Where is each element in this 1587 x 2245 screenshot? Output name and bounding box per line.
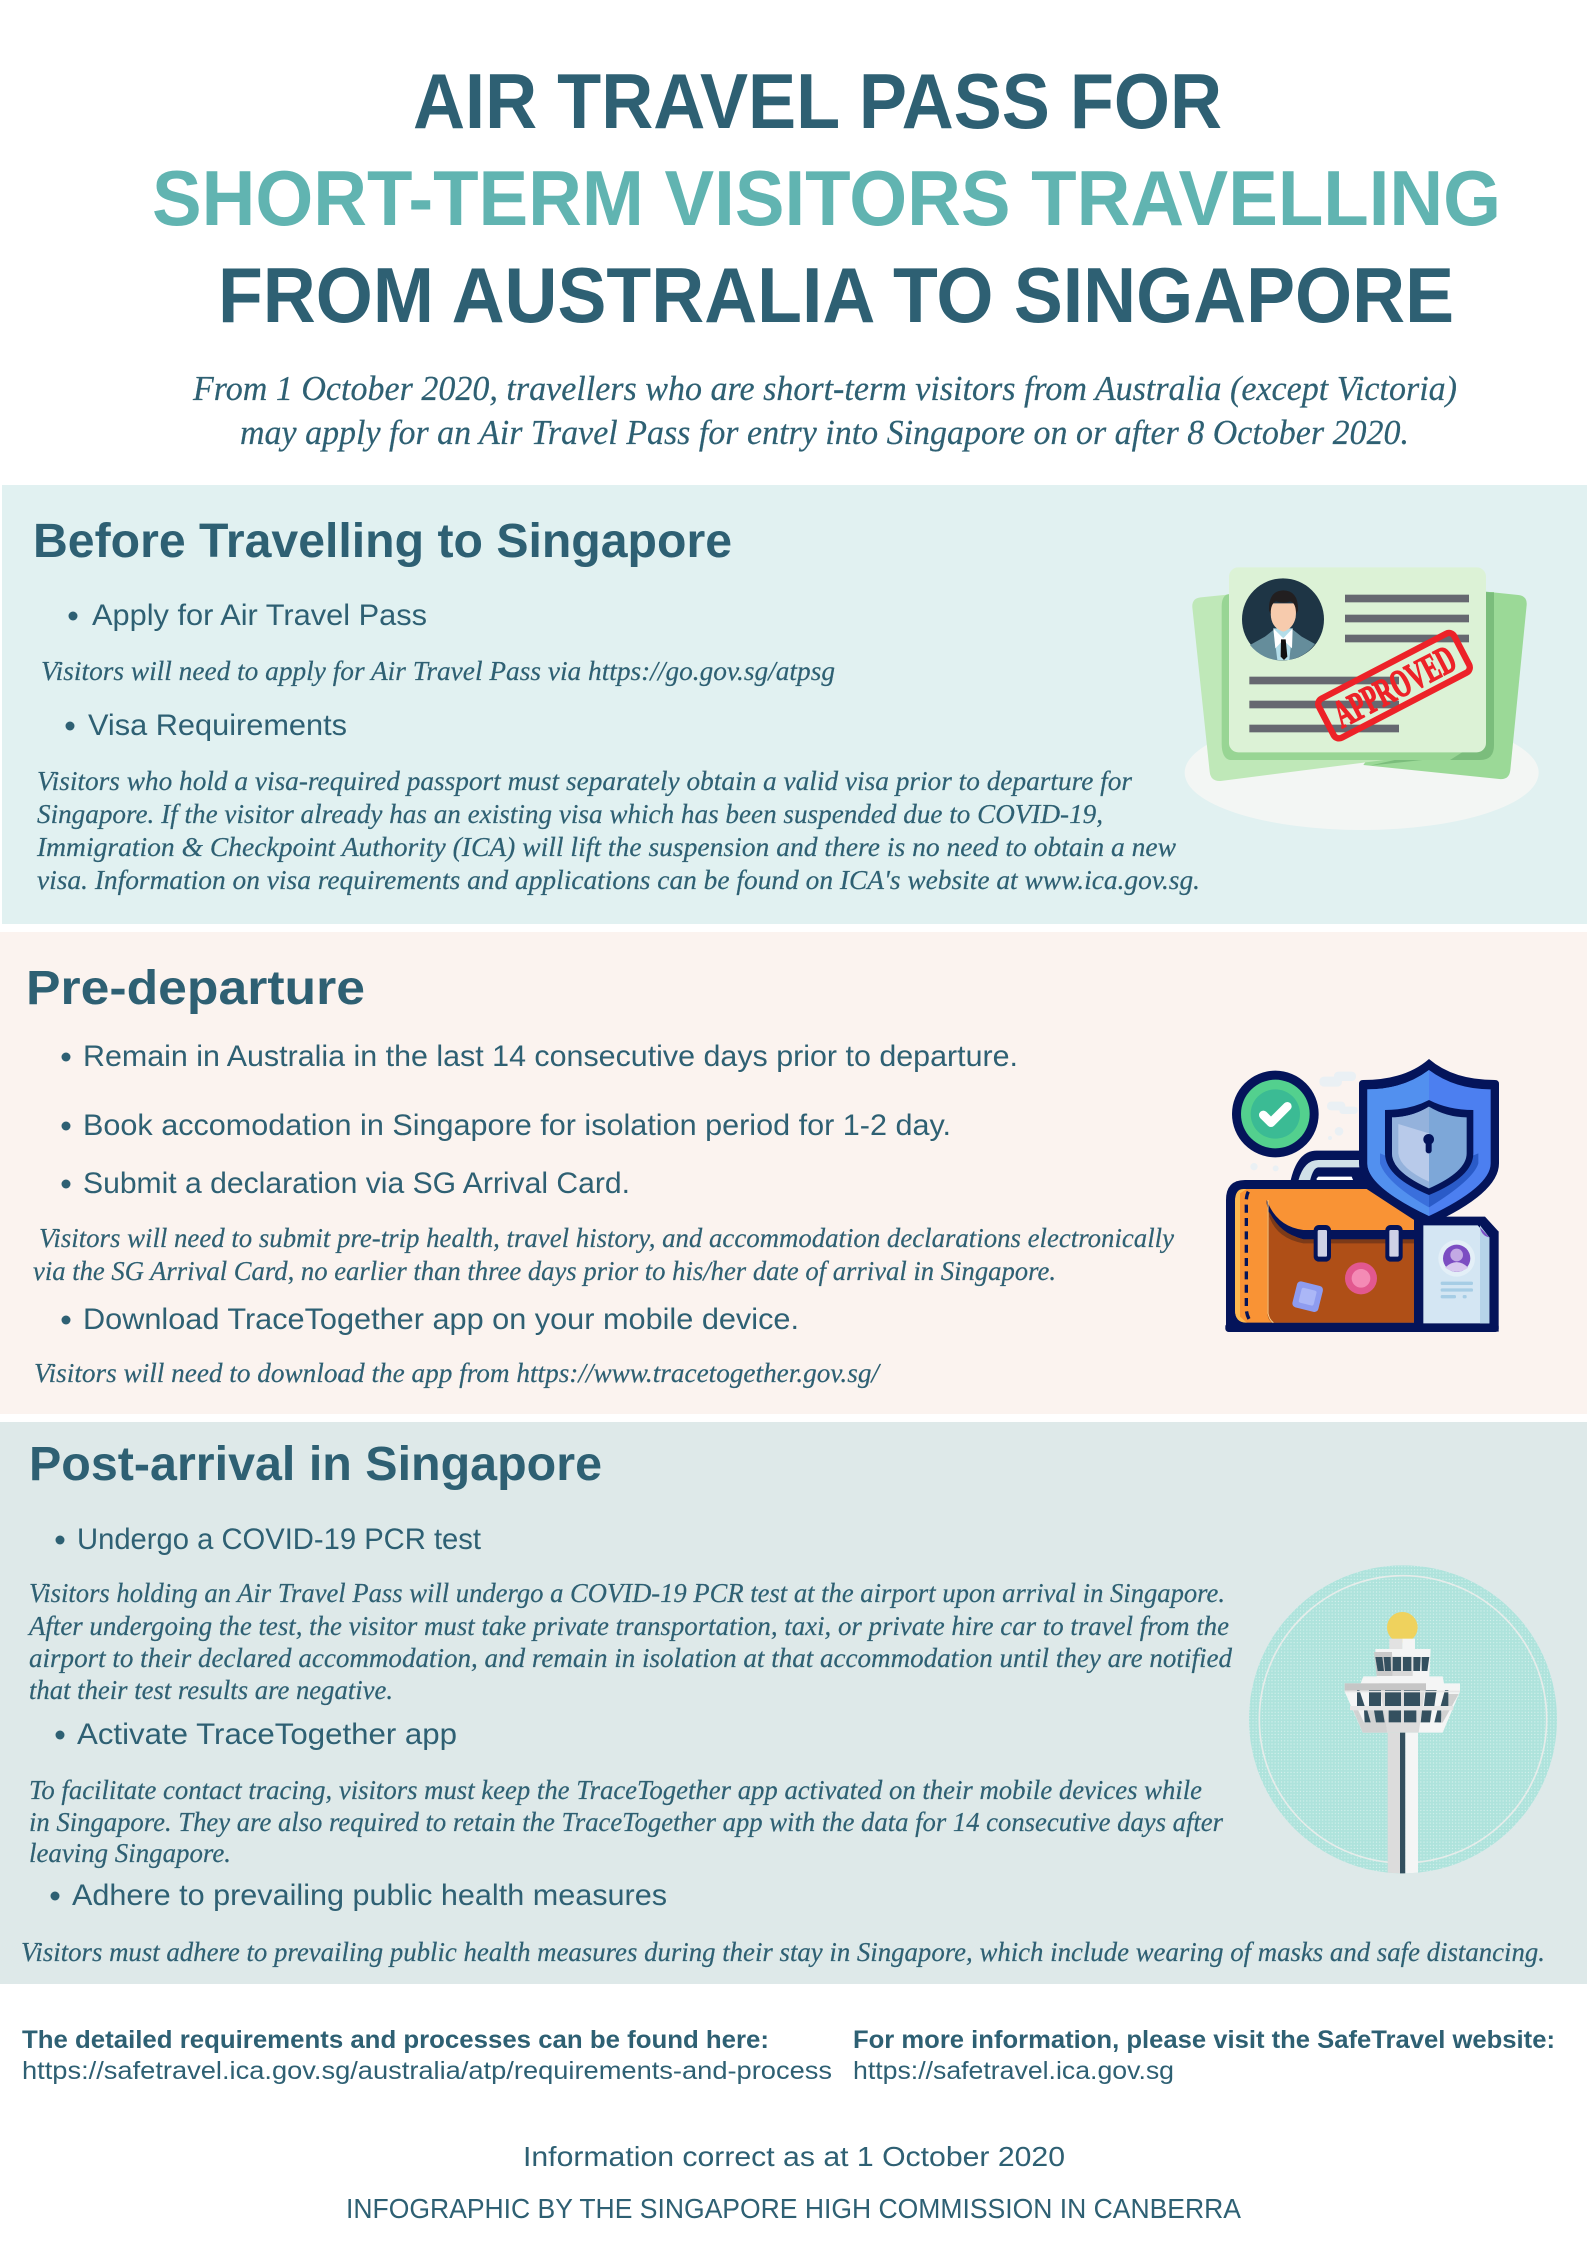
subtitle: may apply for an Air Travel Pass for entry into Singapore on or after 8 October 2020. (240, 413, 1409, 452)
footer: credit: INFOGRAPHIC BY THE SINGAPORE HIGH COMMISSION IN CANBERRA (346, 2193, 1241, 2224)
text: declaration details: via the SG Arrival Card, no earlier than three days prior to his/her date of arrival in Singapore. (33, 1256, 1056, 1286)
bullet: activate TraceTogether: Activate TraceTogether app (77, 1718, 457, 1751)
text: contact tracing details (29, 1775, 1223, 1868)
footer: requirements link (22, 2026, 832, 2085)
bullet: download TraceTogether: Download TraceTogether app on your mobile device. (83, 1303, 799, 1336)
heading: post-arrival: Post-arrival in Singapore (29, 1438, 602, 1491)
footer: SafeTravel link: https://safetravel.ica.gov.sg (853, 2057, 1174, 2085)
subtitle (192, 369, 1457, 452)
panel: post-arrival in Singapore (0, 1422, 1587, 1984)
title: AIR TRAVEL PASS FOR (413, 57, 1222, 145)
icon: suitcase, shield and document (1225, 1059, 1499, 1332)
text: PCR test details (27, 1578, 1232, 1705)
text: contact tracing details: leaving Singapore. (29, 1838, 231, 1868)
bullet: book accommodation: Book accomodation in Singapore for isolation period for 1-2 day. (83, 1109, 951, 1142)
bullet: undergo PCR test: Undergo a COVID-19 PCR test (77, 1523, 482, 1556)
text: declaration details (33, 1223, 1174, 1286)
icon: document (1414, 1217, 1499, 1332)
icon: Changi control tower (1249, 1565, 1557, 1876)
footer: requirements link: https://safetravel.ica.gov.sg/australia/atp/requirements-and-process (22, 2057, 832, 2085)
text: PCR test details: that their test results are negative. (29, 1675, 393, 1705)
footer: SafeTravel link (853, 2026, 1555, 2085)
text: contact tracing details: To facilitate contact tracing, visitors must keep the TraceTogether app activated on their mobile devices while (29, 1775, 1202, 1805)
icon: approved stamp: APPROVED (1326, 637, 1463, 737)
icon: check badge (1232, 1071, 1319, 1157)
bullet: visa requirements: Visa Requirements (88, 709, 347, 742)
panel: before travelling to Singapore (2, 485, 1587, 924)
title: SHORT-TERM VISITORS TRAVELLING (152, 154, 1501, 242)
title (152, 57, 1501, 339)
icon: shield (1359, 1059, 1499, 1225)
text: visa details: Immigration & Checkpoint Authority (ICA) will lift the suspension and there is no need to obtain a new (36, 832, 1176, 862)
text: contact tracing details: in Singapore. They are also required to retain the TraceTogether app with the data for 14 consecutive days after (29, 1807, 1223, 1837)
bullet: submit declaration: Submit a declaration via SG Arrival Card. (83, 1167, 630, 1200)
subtitle: From 1 October 2020, travellers who are short-term visitors from Australia (except Victoria) (192, 369, 1457, 408)
bullet: adhere to health measures: Adhere to prevailing public health measures (72, 1879, 667, 1912)
text: PCR test details: airport to their declared accommodation, and remain in isolation at that accommodation until they are notified (29, 1643, 1232, 1673)
icon: approved ID card (1185, 567, 1539, 830)
panel: pre-departure (0, 932, 1587, 1414)
text: visa details (36, 766, 1200, 895)
text: health measures details: Visitors must adhere to prevailing public health measures during their stay in Singapore, which include wearing of masks and safe distancing. (21, 1937, 1545, 1967)
text: apply via link: Visitors will need to apply for Air Travel Pass via https://go.gov.sg/atpsg (41, 656, 835, 686)
text: declaration details: Visitors will need to submit pre-trip health, travel history, and accommodation declarations electronically (39, 1223, 1174, 1253)
footer: SafeTravel link: For more information, please visit the SafeTravel website: (853, 2026, 1555, 2054)
text: visa details: Singapore. If the visitor already has an existing visa which has been suspended due to COVID-19, (37, 799, 1103, 829)
text: visa details: visa. Information on visa requirements and applications can be found on ICA's website at www.ica.gov.sg. (37, 865, 1200, 895)
bullet: remain in Australia: Remain in Australia in the last 14 consecutive days prior to departure. (83, 1040, 1018, 1073)
text: PCR test details: Visitors holding an Air Travel Pass will undergo a COVID-19 PCR test at the airport upon arrival in Singapore. (29, 1578, 1225, 1608)
bullet: apply for air travel pass: Apply for Air Travel Pass (92, 599, 427, 632)
icon: avatar (1242, 578, 1324, 661)
text: visa details: Visitors who hold a visa-required passport must separately obtain a valid visa prior to departure for (37, 766, 1132, 796)
footer: date note: Information correct as at 1 October 2020 (523, 2141, 1065, 2172)
text: PCR test details: After undergoing the test, the visitor must take private transportation, taxi, or private hire car to travel from the (27, 1611, 1229, 1641)
heading: before travelling: Before Travelling to Singapore (33, 515, 732, 568)
title: FROM AUSTRALIA TO SINGAPORE (218, 251, 1454, 339)
footer: requirements link: The detailed requirements and processes can be found here: (22, 2026, 769, 2054)
heading: pre-departure: Pre-departure (26, 962, 365, 1015)
icon: approved stamp (1316, 631, 1472, 741)
text: app download link: Visitors will need to download the app from https://www.tracetogether.gov.sg/ (34, 1358, 882, 1388)
